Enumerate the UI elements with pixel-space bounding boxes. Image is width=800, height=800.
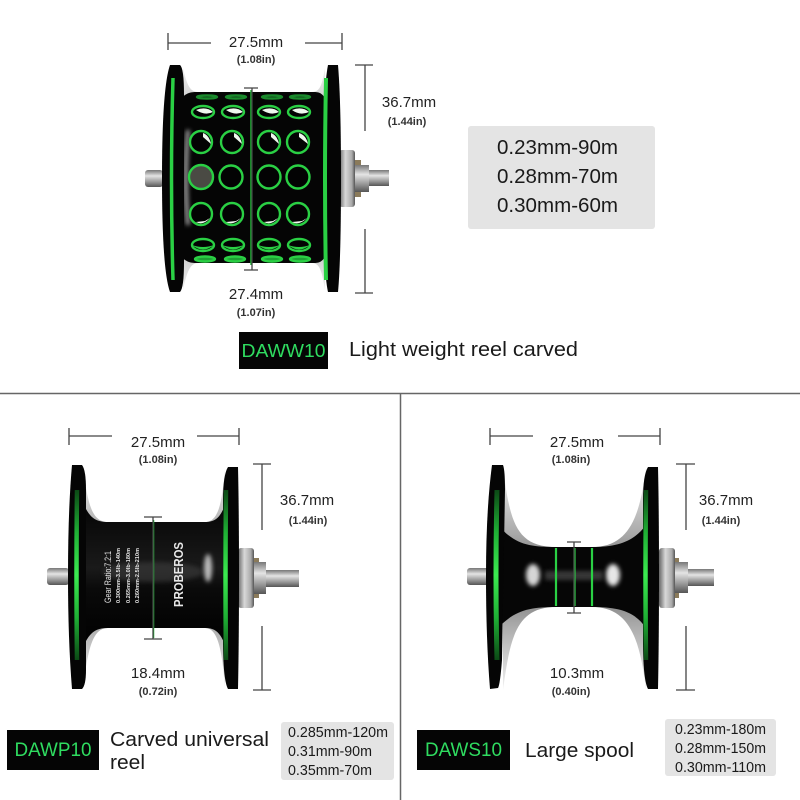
right spindle [659, 548, 714, 608]
left spindle [467, 568, 491, 585]
line capacity box: 0.31mm-90m [288, 744, 372, 760]
reel: DAWP10 spool [47, 465, 299, 689]
barrel body [84, 505, 225, 645]
spool barrel [180, 92, 326, 263]
neck rings [556, 548, 592, 606]
dimension: neck: 10.3mm [550, 665, 604, 682]
dimension: top width: (1.08in) [237, 54, 276, 66]
dimension: height [676, 464, 753, 690]
spool print: 0.300mm-3.5lb-140m [116, 548, 122, 603]
reel: DAWS10 spool [467, 465, 714, 690]
line capacity box: 0.285mm-120m [288, 725, 388, 741]
description: Carved universal [110, 729, 269, 751]
spool print: 0.265mm-3.0lb-180m [126, 548, 132, 603]
description: reel [110, 752, 145, 774]
right flange [643, 467, 659, 689]
right spindle [339, 150, 389, 207]
spool print: 0.260mm-2.5lb-210m [135, 548, 141, 603]
dimension: height: (1.44in) [702, 515, 741, 527]
dimension: height: 36.7mm [280, 492, 334, 509]
right spindle [238, 548, 299, 608]
dimension: top width: 27.5mm [229, 34, 283, 51]
line capacity box: 0.28mm-70m [497, 166, 618, 188]
model badge: DAWS10: DAWS10 [425, 740, 502, 761]
spool flare [83, 468, 225, 688]
dimension: neck [550, 542, 604, 698]
dimension: top width [490, 428, 660, 466]
dimension: barrel [131, 517, 185, 698]
dimension: top width: 27.5mm [131, 434, 185, 451]
dimension: top width [168, 33, 342, 66]
spool flare [183, 68, 325, 290]
spool print: PROBEROS [171, 542, 186, 607]
dimension: top width: (1.08in) [552, 454, 591, 466]
description: Light weight reel carved [349, 339, 578, 361]
model badge: DAWW10 [239, 332, 328, 369]
reel: DAWW10 carved spool [145, 65, 389, 292]
dimension: height: (1.44in) [289, 515, 328, 527]
line capacity box: 0.35mm-70m [288, 763, 372, 779]
dimension: height [253, 464, 334, 690]
model badge: DAWS10 [417, 730, 510, 770]
dimension: barrel: (0.72in) [139, 686, 178, 698]
dividers [0, 393, 800, 800]
description: Large spool [525, 740, 634, 762]
left spindle [47, 568, 69, 585]
panel: DAWS10 [417, 428, 776, 776]
center ring [250, 90, 252, 265]
line capacity box [281, 722, 394, 780]
line capacity box [468, 126, 655, 229]
model badge: DAWW10: DAWW10 [242, 341, 326, 361]
left spindle [145, 170, 163, 187]
line capacity box: 0.28mm-150m [675, 741, 766, 757]
line capacity box: 0.23mm-180m [675, 722, 766, 738]
left flange [162, 65, 184, 292]
center ring [152, 520, 154, 638]
spool flare [503, 468, 646, 690]
dimension: barrel: 18.4mm [131, 665, 185, 682]
dimension: height: (1.44in) [388, 116, 427, 128]
right flange [323, 65, 341, 292]
line capacity box: 0.30mm-110m [675, 760, 766, 776]
panel: DAWP10 [7, 428, 394, 780]
description [110, 729, 269, 774]
dimension: top width: (1.08in) [139, 454, 178, 466]
dimension: top width: 27.5mm [550, 434, 604, 451]
dimension: height [355, 65, 436, 293]
carved holes [189, 96, 310, 262]
dimension: barrel: (1.07in) [237, 307, 276, 319]
spool print: Gear Ratio:7.2:1 [103, 551, 114, 603]
hole green lower lips [192, 245, 310, 250]
right flange [223, 467, 239, 689]
hole highlights [196, 108, 309, 223]
left flange [68, 465, 86, 689]
left flange [486, 465, 505, 689]
model badge: DAWP10: DAWP10 [14, 740, 92, 761]
spool print [103, 542, 186, 607]
panel: DAWW10 [145, 33, 655, 369]
dimension: neck: (0.40in) [552, 686, 591, 698]
line capacity box [665, 719, 776, 776]
spool neck [498, 525, 646, 628]
dimension: barrel: 27.4mm [229, 286, 283, 303]
model badge: DAWP10 [7, 730, 99, 770]
dimension: height: 36.7mm [699, 492, 753, 509]
dimension: height: 36.7mm [382, 94, 436, 111]
dimension: top width [69, 428, 239, 466]
line capacity box: 0.23mm-90m [497, 137, 618, 159]
line capacity box: 0.30mm-60m [497, 195, 618, 217]
dimension: barrel [229, 88, 283, 319]
